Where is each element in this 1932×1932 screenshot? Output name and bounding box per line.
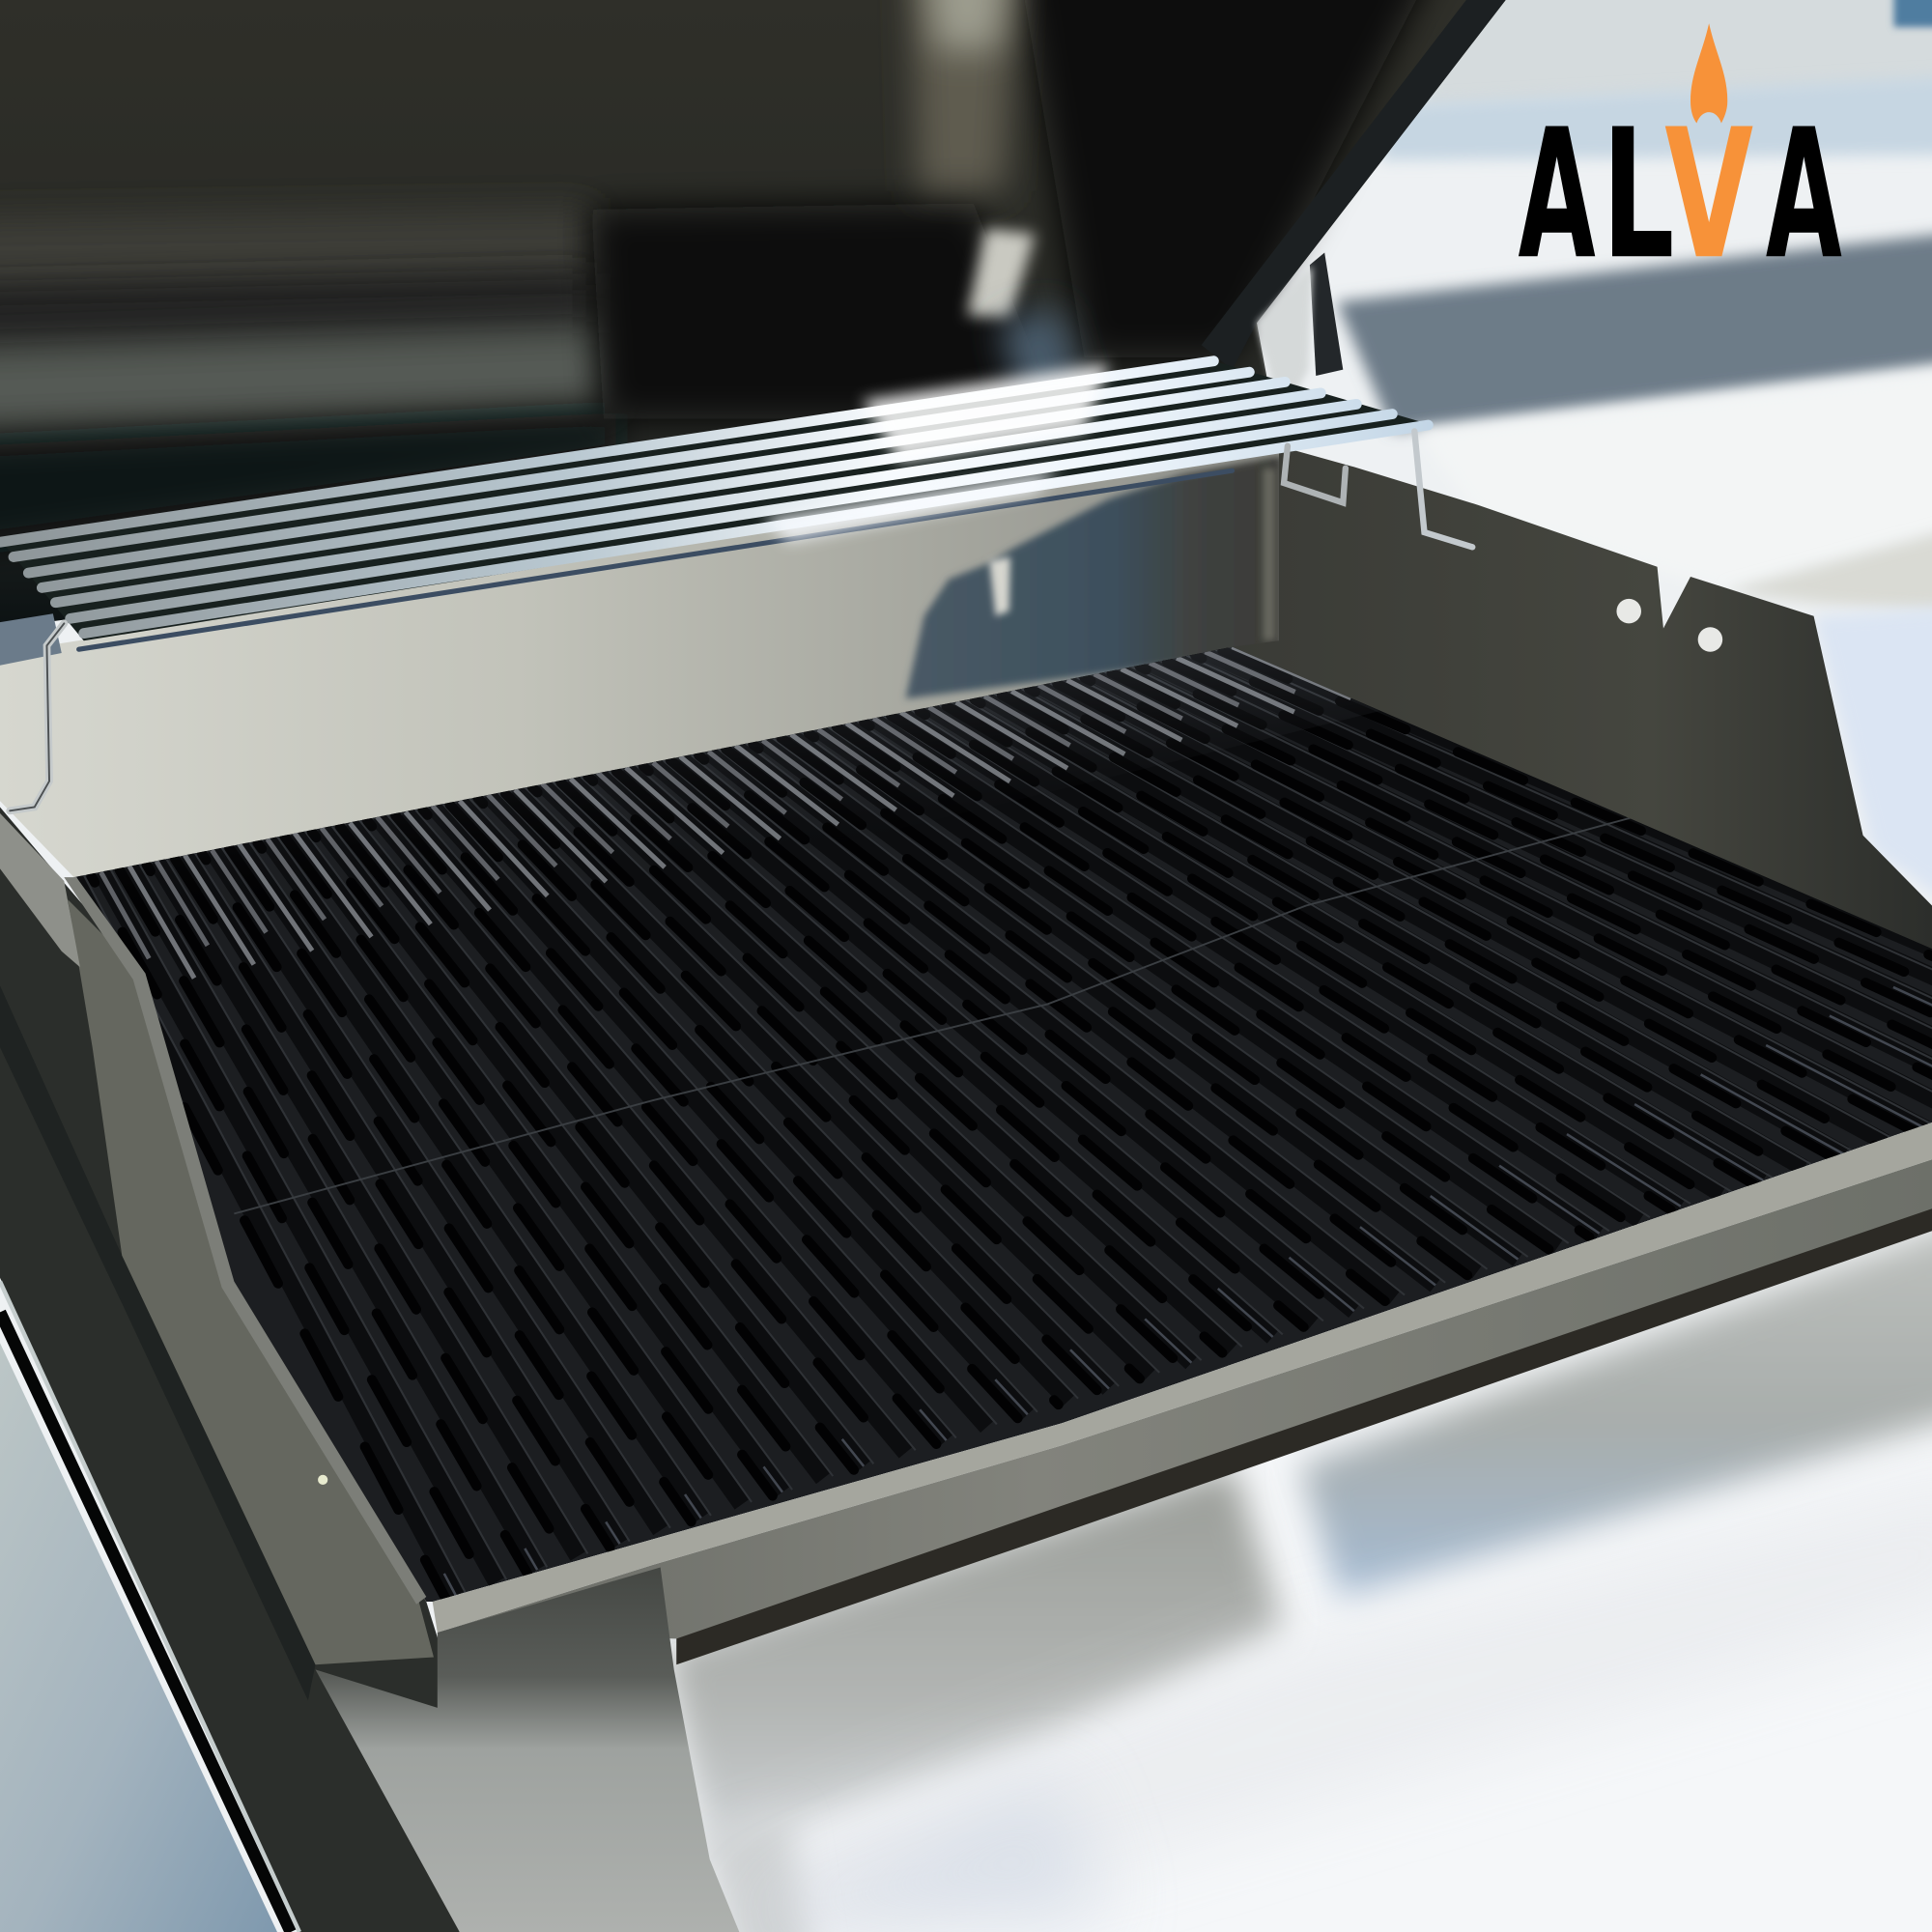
back wall of firebox <box>0 450 1288 877</box>
letter V in orange: V <box>1664 90 1753 298</box>
letter A: A <box>1518 90 1596 298</box>
cooking grate <box>64 644 1932 1602</box>
panel seams <box>234 815 1638 1213</box>
icon: flame <box>1690 23 1727 124</box>
glossy rib ends at front <box>442 985 1932 1596</box>
warming rack <box>0 361 1472 810</box>
right side wall of firebox <box>1233 446 1932 955</box>
slots <box>64 650 1932 1600</box>
front corner panel <box>316 1567 739 1932</box>
letter A: A <box>1766 90 1842 298</box>
front rim of firebox <box>433 1122 1932 1664</box>
letter L: L <box>1602 90 1674 298</box>
left steel panel <box>0 1282 299 1932</box>
steel front shelf <box>443 1208 1932 1932</box>
rack legs <box>10 623 64 810</box>
shadow on back wall <box>906 456 1282 698</box>
logo: ALVA <box>1518 23 1842 298</box>
back reflections <box>446 647 1379 806</box>
grill lid interior <box>0 0 1506 629</box>
left side of firebox <box>0 807 460 1932</box>
